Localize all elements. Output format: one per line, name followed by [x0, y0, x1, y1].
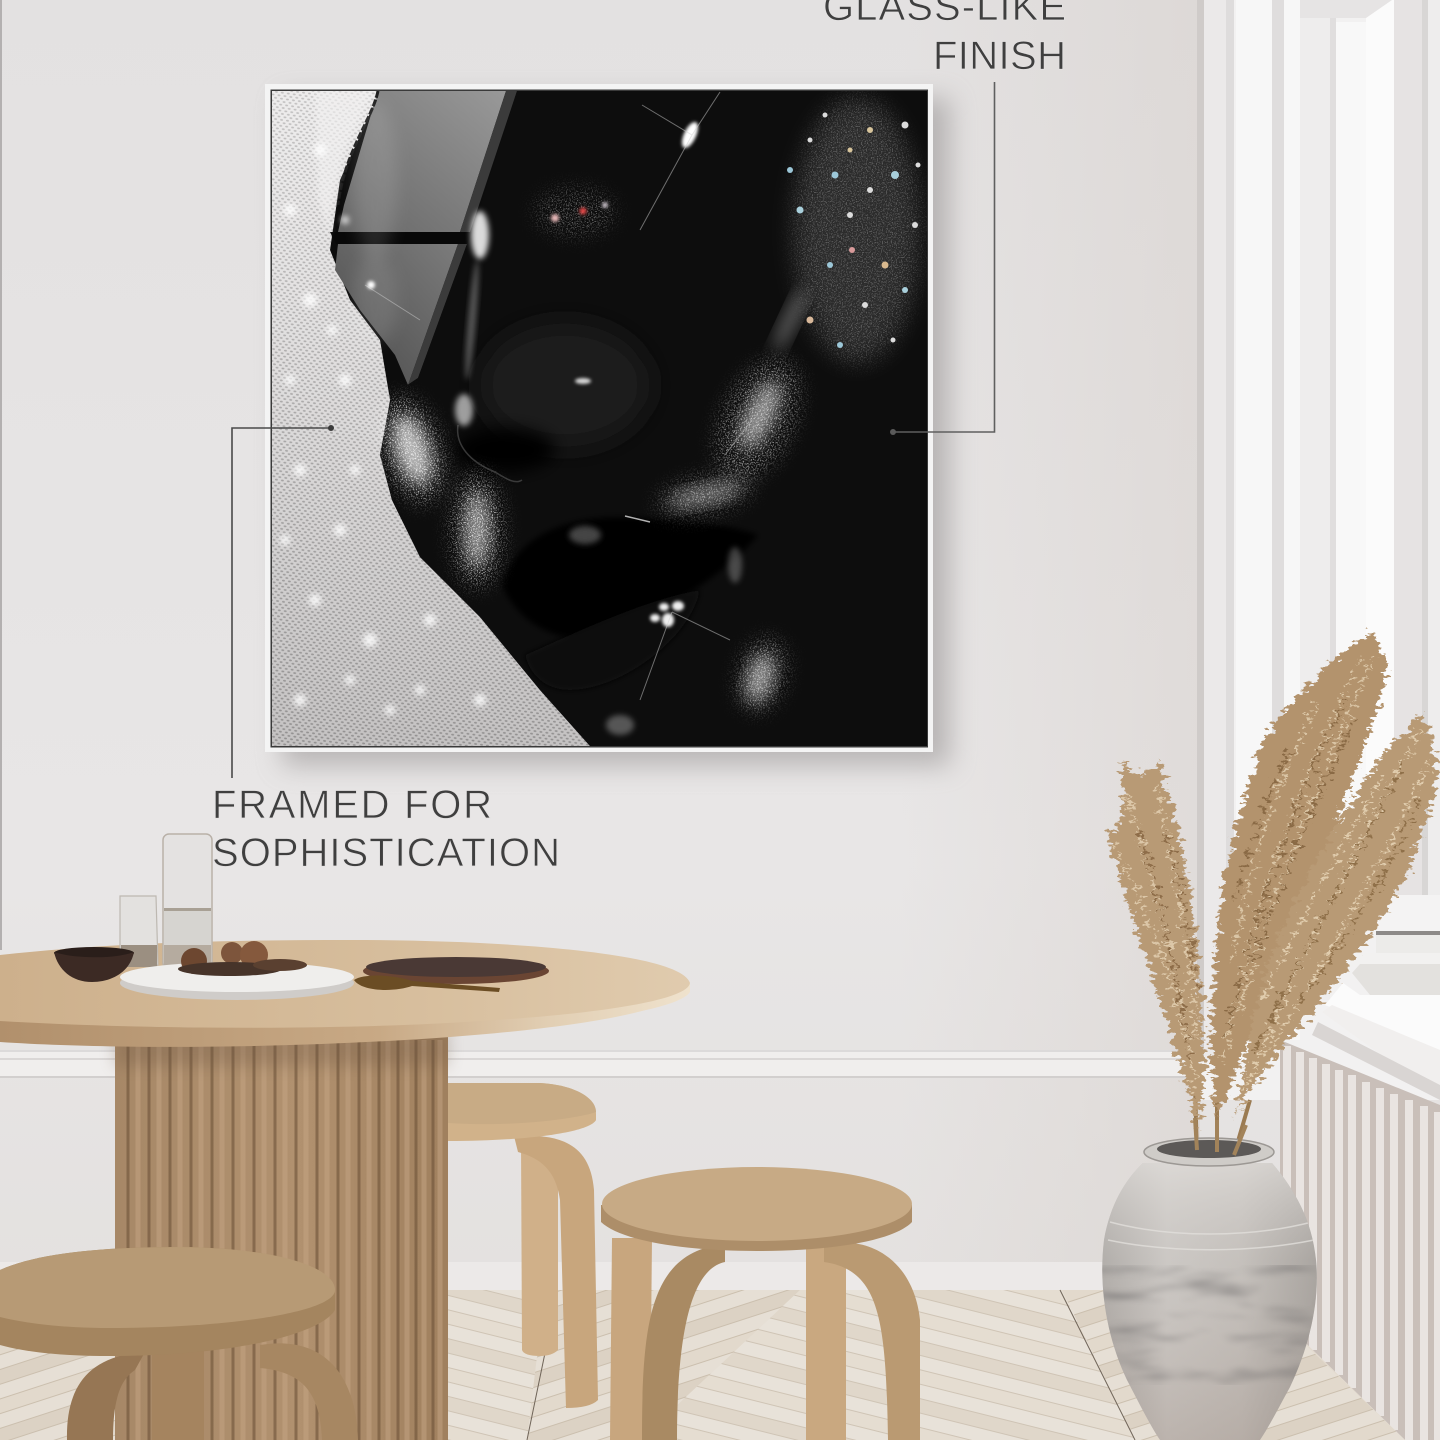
- stems: [1195, 1090, 1250, 1155]
- fluted table column: [115, 1030, 448, 1440]
- plume: right: [1237, 713, 1437, 1115]
- left stool: [0, 1247, 358, 1440]
- framed artwork: [265, 84, 933, 752]
- callout text: glass-like finish: [823, 0, 1066, 78]
- nose: [480, 323, 650, 447]
- white frame: [265, 84, 933, 752]
- spoon: [354, 976, 500, 992]
- glitter field: [551, 95, 921, 365]
- callout line: framed for sophistication: [232, 425, 334, 778]
- pampas grass: [1106, 633, 1437, 1155]
- callout text: framed for sophistication: SOPHISTICATION: [212, 831, 560, 875]
- vase rim: [1144, 1138, 1274, 1166]
- lip highlight: [650, 601, 684, 627]
- ceramic vase: [1100, 1118, 1320, 1440]
- speckled skin grain: [366, 188, 819, 718]
- soft skin highlights: [386, 120, 811, 735]
- callout text: framed for sophistication: FRAMED FOR: [212, 783, 492, 827]
- pane edge strip: [408, 91, 517, 385]
- black dividing bar: [330, 232, 333, 236]
- marble tray with nuts: [120, 941, 354, 1000]
- glass carafe: [163, 834, 212, 969]
- floor: [0, 1290, 1405, 1440]
- front stool: [601, 1167, 920, 1440]
- back stool: [448, 1083, 598, 1408]
- window frame: [1197, 0, 1440, 1100]
- drinking glass: [120, 896, 158, 967]
- wall moulding: [0, 1050, 1200, 1290]
- black portrait base: [330, 92, 590, 746]
- sparkling fabric veil: [272, 91, 590, 746]
- radiator: [1280, 1040, 1440, 1440]
- lips: [502, 517, 758, 640]
- pane speckle haze: [353, 100, 397, 260]
- callout line: glass-like finish: [890, 82, 994, 435]
- wooden plate: [363, 957, 549, 984]
- veil sparkles: [280, 144, 486, 715]
- round table top: [0, 940, 690, 1047]
- face shapes: [380, 92, 590, 746]
- plume: left: [1106, 758, 1204, 1130]
- books and sill: [1350, 895, 1440, 931]
- glass reflection lower pane: [335, 244, 458, 385]
- hood edge: [338, 91, 378, 205]
- glass reflection upper pane: [338, 91, 506, 232]
- callout text: framed for sophistication: [212, 783, 560, 875]
- artwork shadow: [282, 98, 950, 766]
- callout text: glass-like finish: FINISH: [933, 34, 1066, 78]
- starbursts: [365, 92, 752, 700]
- dark bowl: [54, 947, 134, 982]
- plume: centre: [1211, 633, 1386, 1115]
